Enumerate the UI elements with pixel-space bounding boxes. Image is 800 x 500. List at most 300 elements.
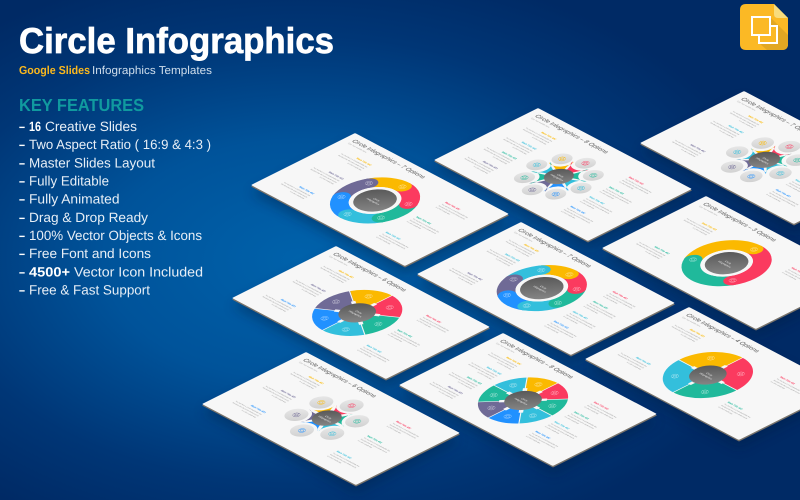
slide title: Circle Infographics – 3 Options <box>701 202 778 243</box>
right text blocks: Your text here is a brief placeholder line <box>531 432 559 447</box>
left text blocks: in a short simple way <box>457 381 473 390</box>
right text blocks: in a short simple way <box>579 201 596 209</box>
left text blocks: Main Title 402 <box>505 356 522 365</box>
left text blocks <box>277 151 373 200</box>
right text blocks: Main Title 402 <box>336 450 353 459</box>
left text blocks: in a short simple way <box>457 277 474 285</box>
pie diagram <box>458 367 588 434</box>
right text blocks: Your text here is a brief placeholder line <box>589 403 618 418</box>
left text blocks: Main Title 402 <box>355 157 373 166</box>
right text blocks: that describes the option shown nearby <box>389 424 417 439</box>
left text blocks: Your text here is a brief placeholder line <box>638 242 667 256</box>
key features list: – <box>19 246 25 261</box>
right text blocks <box>717 376 800 422</box>
left text blocks: Your text here is a brief placeholder line <box>685 218 714 233</box>
right text blocks <box>525 401 622 450</box>
left text blocks: Main Title 402 <box>504 253 521 262</box>
right text blocks <box>765 179 800 209</box>
right text blocks: that describes the option shown nearby <box>359 348 388 363</box>
right text blocks: in a short simple way <box>717 406 734 415</box>
ring diagram <box>471 252 613 324</box>
right text blocks: in a short simple way <box>602 296 619 304</box>
left text blocks: Your text here is a brief placeholder line <box>674 140 702 155</box>
left text blocks: Your text here is a brief placeholder line <box>505 137 534 152</box>
slide subtitle: Type Your Subtitle Here <box>681 316 701 327</box>
right text blocks <box>560 176 657 225</box>
left text blocks: that describes the option shown nearby <box>319 267 348 282</box>
left text blocks: Your text here is a brief placeholder line <box>490 352 518 367</box>
left text blocks: in a short simple way <box>512 146 528 155</box>
right text blocks: Main Title 402 <box>593 401 610 410</box>
icon: Google Slides logo <box>740 4 788 50</box>
left text blocks: that describes the option shown nearby <box>310 168 338 183</box>
right text blocks: Main Title 402 <box>569 205 587 214</box>
right text blocks: Main Title 402 <box>534 430 552 439</box>
right text block: in a short simple way <box>781 272 798 280</box>
slide mockup: bottom left, 6 option flower <box>202 352 460 493</box>
slide mockup: top center, 8 option flower <box>434 108 692 249</box>
left text blocks: Main Title 402 <box>298 186 315 195</box>
right text blocks: Your text here is a brief placeholder line <box>588 303 617 318</box>
left text blocks: Your text here is a brief placeholder line <box>620 352 648 367</box>
right text blocks: in a short simple way <box>326 455 343 464</box>
left text blocks: Your text here is a brief placeholder line <box>340 153 369 168</box>
right text blocks <box>356 315 454 364</box>
right text blocks: Your text here is a brief placeholder line <box>566 207 594 222</box>
slide title: Circle Infographics – 6 Options <box>301 358 378 399</box>
slide mockup: upper left, 7 option ring <box>251 133 509 274</box>
left text blocks: in a short simple way <box>329 275 345 283</box>
left text blocks: Main Title 402 <box>447 386 464 395</box>
right text blocks: that describes the option shown nearby <box>438 205 466 220</box>
right text blocks: Your text here is a brief placeholder line <box>393 331 421 346</box>
ring diagram <box>658 228 795 298</box>
key features list: Creative Slides <box>45 119 137 134</box>
right text blocks: Main Title 402 <box>385 231 402 240</box>
pie diagram: Infographics <box>514 398 529 406</box>
left text blocks: in a short simple way <box>319 176 335 185</box>
key features list: Free Font and Icons <box>29 246 151 261</box>
key features heading: KEY FEATURES <box>19 95 144 115</box>
left text blocks: in a short simple way <box>346 162 363 171</box>
right text blocks: Your text here is a brief placeholder line <box>362 346 391 361</box>
flower diagram <box>267 388 387 449</box>
left text blocks: Main Title 402 <box>310 284 327 293</box>
right text blocks: that describes the option shown nearby <box>378 235 407 250</box>
left text blocks: in a short simple way <box>477 371 493 380</box>
right text blocks: that describes the option shown nearby <box>605 294 634 309</box>
right text blocks: that describes the option shown nearby <box>546 324 575 339</box>
left text blocks <box>426 350 522 399</box>
slide mockup: lower right, 4 option pie <box>585 307 800 448</box>
slide mockup: middle right, 3 option ring <box>602 196 800 337</box>
left text blocks: Main Title 402 <box>250 405 267 414</box>
left text blocks: in a short simple way <box>473 166 489 174</box>
left text blocks: in a short simple way <box>289 191 306 200</box>
right text blocks: Your text here is a brief placeholder line <box>568 313 597 328</box>
left text blocks: in a short simple way <box>514 249 530 257</box>
left text blocks: Your text here is a brief placeholder line <box>673 324 702 339</box>
right text blocks: Main Title 402 <box>425 315 442 324</box>
left text blocks: Main Title 402 <box>501 151 518 160</box>
left text blocks: in a short simple way <box>241 410 257 418</box>
left text blocks: that describes the option shown nearby <box>502 139 531 153</box>
right text blocks: in a short simple way <box>562 316 579 324</box>
key features list: – <box>19 192 25 207</box>
left text blocks: Main Title 402 <box>689 144 707 153</box>
slide title: Circle Infographics – 7 Options <box>516 228 593 269</box>
right text blocks: that describes the option shown nearby <box>567 415 595 429</box>
slide subtitle: Type Your Subtitle Here <box>513 231 533 242</box>
key features list: – <box>19 228 25 243</box>
right text blocks: Main Title 402 <box>592 301 609 310</box>
left text blocks: Your text here is a brief placeholder line <box>732 111 760 126</box>
right text blocks: in a short simple way <box>543 325 560 334</box>
left text blocks: Your text here is a brief placeholder line <box>292 371 321 386</box>
left text blocks: that describes the option shown nearby <box>467 364 496 378</box>
slide title: Circle Infographics – 8 Options <box>498 339 575 380</box>
left text blocks: that describes the option shown nearby <box>292 281 320 296</box>
right text blocks: in a short simple way <box>583 406 600 415</box>
pie diagram: Circle <box>520 398 529 402</box>
right text blocks: that describes the option shown nearby <box>586 405 615 420</box>
left text blocks <box>632 216 718 259</box>
right text blocks: that describes the option shown nearby <box>563 209 591 224</box>
left text blocks: in a short simple way <box>644 251 661 259</box>
right text blocks: Your text here is a brief placeholder line <box>549 322 578 337</box>
left text blocks: in a short simple way <box>531 136 548 145</box>
right text blocks <box>375 202 473 251</box>
left text blocks: Main Title 402 <box>727 125 745 134</box>
right text blocks: Your text here is a brief placeholder line <box>381 233 410 248</box>
left text blocks: Main Title 402 <box>653 246 671 255</box>
left text blocks: Your text here is a brief placeholder line <box>508 239 536 254</box>
left text blocks <box>445 237 540 285</box>
right text blocks: in a short simple way <box>357 440 373 448</box>
slide title: Circle Infographics – 4 Options <box>684 313 761 354</box>
right text blocks: that describes the option shown nearby <box>329 454 358 469</box>
left text blocks: in a short simple way <box>680 149 697 157</box>
left text blocks: that describes the option shown nearby <box>709 122 738 137</box>
left text blocks: Your text here is a brief placeholder line <box>525 127 553 142</box>
subtitle <box>19 65 212 77</box>
right text blocks: in a short simple way <box>544 426 561 434</box>
subtitle: Infographics Templates <box>92 65 212 77</box>
key features list: Drag & Drop Ready <box>29 210 148 225</box>
pie diagram: Infographics <box>348 310 363 318</box>
left text blocks: Main Title 402 <box>466 272 484 281</box>
right text blocks: Main Title 402 <box>612 291 629 300</box>
right text blocks: Main Title 402 <box>395 421 412 430</box>
right text blocks: Your text here is a brief placeholder line <box>771 191 800 206</box>
key features list: – <box>19 137 25 152</box>
flower diagram <box>495 144 622 209</box>
left text blocks: that describes the option shown nearby <box>448 373 476 388</box>
left text blocks: that describes the option shown nearby <box>289 373 318 388</box>
slide title: Circle Infographics – 6 Options <box>331 252 408 293</box>
left text blocks: Your text here is a brief placeholder line <box>712 120 741 135</box>
left text blocks: in a short simple way <box>495 258 511 267</box>
key features list: – <box>19 282 25 297</box>
key features list: Free & Fast Support <box>29 282 150 297</box>
flower diagram: Infographics <box>755 157 770 165</box>
right text blocks: that describes the option shown nearby <box>360 438 388 453</box>
ring diagram: Infographics <box>366 198 381 206</box>
left text blocks: in a short simple way <box>301 289 317 297</box>
left text blocks <box>613 322 707 370</box>
left text blocks: Your text here is a brief placeholder line <box>466 156 495 171</box>
left text blocks: Your text here is a brief placeholder line <box>234 400 263 415</box>
right text blocks: that describes the option shown nearby <box>409 219 437 234</box>
left text blocks: that describes the option shown nearby <box>232 402 260 417</box>
left text blocks: that describes the option shown nearby <box>429 383 457 398</box>
right text blocks: Your text here is a brief placeholder line <box>332 452 361 467</box>
left text blocks: Your text here is a brief placeholder line <box>264 385 293 400</box>
ring diagram <box>306 165 444 236</box>
left text blocks: in a short simple way <box>271 395 287 403</box>
left text blocks: Your text here is a brief placeholder line <box>322 265 351 280</box>
left text blocks: Main Title 402 <box>338 270 355 279</box>
key features list: – <box>19 264 25 279</box>
left text blocks: that describes the option shown nearby <box>262 387 290 402</box>
right text blocks: Your text here is a brief placeholder line <box>570 413 598 428</box>
right text blocks: Main Title 402 <box>628 176 645 185</box>
right text blocks: Main Title 402 <box>366 344 383 353</box>
pie diagram <box>643 342 772 408</box>
left text blocks <box>668 109 764 157</box>
pie diagram: Circle <box>354 310 363 314</box>
left text blocks <box>461 125 557 174</box>
key features list: – <box>19 119 25 134</box>
left text blocks: Your text here is a brief placeholder line <box>451 268 479 283</box>
left text blocks: Main Title 402 <box>308 376 325 385</box>
right text blocks: that describes the option shown nearby <box>419 318 447 333</box>
slide title: Circle Infographics – 7 Options <box>350 139 427 180</box>
right text blocks: Your text here is a brief placeholder line <box>550 423 578 438</box>
left text blocks: that describes the option shown nearby <box>683 219 711 234</box>
key features list: Master Slides Layout <box>29 155 155 170</box>
right text block <box>781 267 800 287</box>
left text blocks: Main Title 402 <box>523 244 540 253</box>
right text blocks: in a short simple way <box>435 206 451 215</box>
left text blocks: that describes the option shown nearby <box>486 250 514 265</box>
right text blocks: in a short simple way <box>618 181 635 190</box>
key features list: – <box>19 210 25 225</box>
right text blocks: that describes the option shown nearby <box>528 434 556 449</box>
right text blocks: Your text here is a brief placeholder line <box>441 204 469 218</box>
left text blocks: Your text here is a brief placeholder line <box>470 362 499 377</box>
right text blocks: in a short simple way <box>375 236 392 245</box>
right text blocks: Main Title 402 <box>572 311 589 320</box>
slide subtitle: Type Your Subtitle Here <box>698 205 718 216</box>
key features list: Fully Animated <box>29 192 120 207</box>
right text blocks: in a short simple way <box>770 381 786 390</box>
left text blocks: in a short simple way <box>680 334 696 342</box>
left text blocks: Main Title 402 <box>328 171 345 180</box>
right text blocks: that describes the option shown nearby <box>768 192 797 207</box>
slide mockup: top right, 7 option flower <box>640 91 800 232</box>
subtitle: Google Slides <box>19 65 90 77</box>
right text blocks: Your text here is a brief placeholder line <box>392 423 420 437</box>
right text blocks: Your text here is a brief placeholder line <box>624 178 653 193</box>
right text blocks: Your text here is a brief placeholder line <box>723 403 752 418</box>
slide mockup: middle left, 6 option pie <box>232 246 490 387</box>
slide subtitle: Type Your Subtitle Here <box>530 117 550 128</box>
right text blocks: Main Title 402 <box>366 435 383 444</box>
right text blocks: in a short simple way <box>386 425 402 434</box>
slide subtitle: Type Your Subtitle Here <box>298 361 318 372</box>
left text blocks: Main Title 402 <box>486 366 503 375</box>
right text blocks: that describes the option shown nearby <box>565 314 594 329</box>
left text blocks: that describes the option shown nearby <box>487 354 515 369</box>
right text blocks: in a short simple way <box>387 334 403 342</box>
right text blocks: that describes the option shown nearby <box>390 332 418 347</box>
flower diagram: Circle <box>556 174 565 178</box>
left text blocks: Main Title 402 <box>747 115 764 124</box>
left text blocks: that describes the option shown nearby <box>280 183 309 198</box>
right text blocks: Your text here is a brief placeholder line <box>585 198 613 213</box>
left text blocks: in a short simple way <box>271 304 287 312</box>
right text blocks: in a short simple way <box>525 435 541 444</box>
ring diagram: Infographics <box>717 260 732 268</box>
ring diagram: Infographics <box>532 285 548 293</box>
right text blocks: Main Title 402 <box>444 202 461 211</box>
right text blocks: that describes the option shown nearby <box>547 424 575 439</box>
right text blocks: in a short simple way <box>765 194 782 202</box>
right text blocks: that describes the option shown nearby <box>582 199 610 214</box>
left text blocks: that describes the option shown nearby <box>483 148 511 163</box>
right text blocks: in a short simple way <box>564 416 580 425</box>
left text blocks: in a short simple way <box>718 130 735 138</box>
left text blocks: in a short simple way <box>438 391 454 399</box>
flower diagram: Circle <box>761 157 770 161</box>
left text blocks: that describes the option shown nearby <box>522 129 550 144</box>
left text blocks: Main Title 402 <box>521 141 538 150</box>
right text blocks: that describes the option shown nearby <box>602 190 630 204</box>
right text blocks: Main Title 402 <box>396 329 413 338</box>
right text blocks: in a short simple way <box>560 210 576 219</box>
left text blocks: Main Title 402 <box>280 390 297 399</box>
left text blocks: in a short simple way <box>492 156 508 165</box>
slide subtitle: Type Your Subtitle Here <box>347 142 367 153</box>
ring diagram: Circle <box>372 198 381 202</box>
left text blocks <box>259 263 355 312</box>
right text blocks: Your text here is a brief placeholder line <box>608 293 637 308</box>
left text blocks: that describes the option shown nearby <box>671 326 699 341</box>
left text blocks: in a short simple way <box>299 381 315 389</box>
left text blocks: Your text here is a brief placeholder line <box>312 167 341 182</box>
left text blocks: in a short simple way <box>626 362 642 370</box>
left text blocks: Main Title 402 <box>689 329 706 338</box>
left text blocks: that describes the option shown nearby <box>262 296 290 311</box>
right text blocks <box>543 291 641 340</box>
flower diagram: Infographics <box>549 174 565 182</box>
right text blocks: Main Title 402 <box>775 189 792 198</box>
key features list: 4500+ <box>29 264 70 279</box>
slide subtitle: Type Your Subtitle Here <box>736 100 756 111</box>
key features list: 16 <box>29 119 41 134</box>
pie diagram: Circle <box>705 372 714 377</box>
right text blocks: Your text here is a brief placeholder line <box>412 218 440 233</box>
left text blocks: that describes the option shown nearby <box>464 158 492 173</box>
slide subtitle: Type Your Subtitle Here <box>495 342 515 353</box>
left text blocks: that describes the option shown nearby <box>337 155 366 169</box>
key features list: 100% Vector Objects & Icons <box>29 228 202 243</box>
left text blocks: Main Title 402 <box>482 161 499 170</box>
left text blocks: Your text here is a brief placeholder line <box>485 147 514 162</box>
key features list: Vector Icon Included <box>74 264 203 279</box>
right text blocks: Main Title 402 <box>779 376 796 385</box>
left text blocks: that describes the option shown nearby <box>505 241 533 256</box>
pie diagram <box>294 281 420 345</box>
key features list: – <box>19 155 25 170</box>
left text blocks: Your text here is a brief placeholder line <box>431 381 460 396</box>
left text blocks: that describes the option shown nearby <box>448 269 477 284</box>
flower diagram: Infographics <box>317 415 333 423</box>
right text blocks: Your text here is a brief placeholder line <box>605 188 633 203</box>
right text blocks: in a short simple way <box>406 221 422 229</box>
right text blocks: that describes the option shown nearby <box>720 405 749 420</box>
right text blocks: Main Title 402 <box>553 421 571 430</box>
right text blocks: Your text here is a brief placeholder line <box>363 437 391 452</box>
flower diagram <box>704 128 800 191</box>
key features list: – <box>19 173 25 188</box>
left text blocks: Main Title 402 <box>540 131 557 140</box>
right text blocks: in a short simple way <box>356 349 373 358</box>
left text blocks: in a short simple way <box>692 227 708 236</box>
flower diagram: Circle <box>324 415 333 420</box>
right text blocks: Main Title 402 <box>415 216 432 225</box>
left text blocks: that describes the option shown nearby <box>671 141 700 156</box>
right text blocks: Main Title 402 <box>553 320 570 329</box>
right text blocks <box>326 421 424 470</box>
ring diagram: Circle <box>539 285 548 290</box>
key features list: Fully Editable <box>29 173 109 188</box>
slide title: Circle Infographics – 8 Options <box>533 114 610 155</box>
main title: Circle Infographics <box>19 20 334 61</box>
right text blocks: Your text here is a brief placeholder line <box>422 317 450 331</box>
left text blocks: Your text here is a brief placeholder line <box>294 279 323 294</box>
key features list: Two Aspect Ratio ( 16:9 & 4:3 ) <box>29 137 211 152</box>
right text blocks: in a short simple way <box>583 305 599 314</box>
left text blocks: in a short simple way <box>496 361 513 370</box>
ring diagram: Circle <box>724 260 733 265</box>
left text blocks: that describes the option shown nearby <box>617 354 645 369</box>
left text blocks: Your text here is a brief placeholder line <box>283 182 311 197</box>
slide subtitle: Type Your Subtitle Here <box>328 255 348 266</box>
right text blocks: in a short simple way <box>599 191 615 200</box>
right text blocks: in a short simple way <box>416 319 432 328</box>
right text blocks: Main Title 402 <box>608 186 625 195</box>
key features list <box>19 119 211 297</box>
pie diagram: Infographics <box>698 372 714 380</box>
left text blocks <box>229 369 325 418</box>
right text blocks: Main Title 402 <box>573 411 590 420</box>
left text blocks: Main Title 402 <box>701 222 718 231</box>
right text blocks: that describes the option shown nearby <box>586 304 614 319</box>
right text blocks: Main Title 402 <box>727 401 744 410</box>
left text blocks: Your text here is a brief placeholder line <box>264 294 293 309</box>
left text blocks: in a short simple way <box>738 120 755 129</box>
left text blocks: Main Title 402 <box>280 299 297 308</box>
slide mockup: bottom center, 8 option pie <box>399 333 657 474</box>
left text blocks: that describes the option shown nearby <box>635 243 664 258</box>
left text blocks: Main Title 402 <box>466 376 483 385</box>
right text blocks: that describes the option shown nearby <box>621 180 650 195</box>
left text blocks: Main Title 402 <box>635 357 652 366</box>
left text blocks: that describes the option shown nearby <box>729 112 757 127</box>
right text blocks: Main Title 402 <box>588 196 606 205</box>
